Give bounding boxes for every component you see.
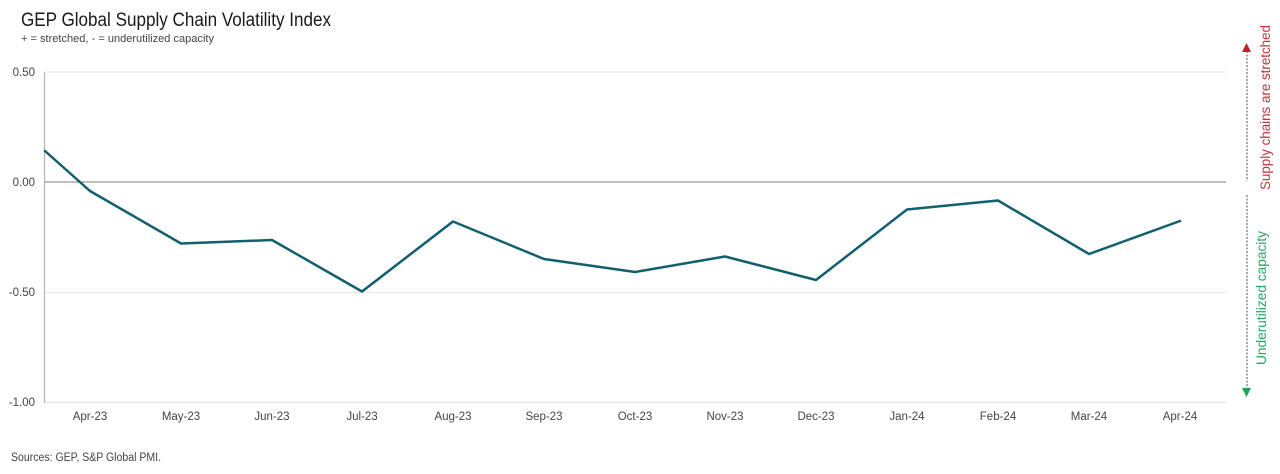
data line	[45, 151, 1180, 292]
y-axis labels	[9, 67, 35, 409]
subtitle: + = stretched, - = underutilized capacity	[21, 33, 214, 45]
x-axis labels: May-23	[162, 411, 200, 423]
arrow: underutilized capacity	[1242, 195, 1251, 397]
y-axis labels: -0.50	[9, 287, 35, 299]
x-axis labels: Apr-23	[73, 411, 107, 423]
label: underutilized capacity: Underutilized capacity	[1254, 231, 1269, 365]
y-axis labels: 0.50	[13, 67, 35, 79]
arrow: supply chains are stretched	[1242, 43, 1251, 181]
x-axis labels: Jan-24	[889, 411, 925, 423]
x-axis labels: Apr-24	[1163, 411, 1198, 423]
y-axis labels: 0.00	[13, 177, 35, 189]
x-axis labels: Mar-24	[1071, 411, 1108, 423]
x-axis labels: Jun-23	[254, 411, 290, 423]
x-axis labels: Sep-23	[525, 411, 563, 423]
source note: Sources: GEP, S&P Global PMI.	[11, 452, 161, 464]
title: GEP Global Supply Chain Volatility Index	[21, 10, 331, 31]
x-axis labels: Dec-23	[797, 411, 835, 423]
label: supply chains are stretched: Supply chains are stretched	[1258, 25, 1273, 190]
x-axis labels: Nov-23	[706, 411, 744, 423]
x-axis labels: Aug-23	[434, 411, 472, 423]
x-axis labels	[73, 411, 1198, 423]
x-axis labels: Oct-23	[618, 411, 652, 423]
line chart	[9, 67, 1226, 423]
x-axis labels: Feb-24	[980, 411, 1017, 423]
x-axis labels: Jul-23	[346, 411, 378, 423]
y-axis labels: -1.00	[9, 397, 35, 409]
